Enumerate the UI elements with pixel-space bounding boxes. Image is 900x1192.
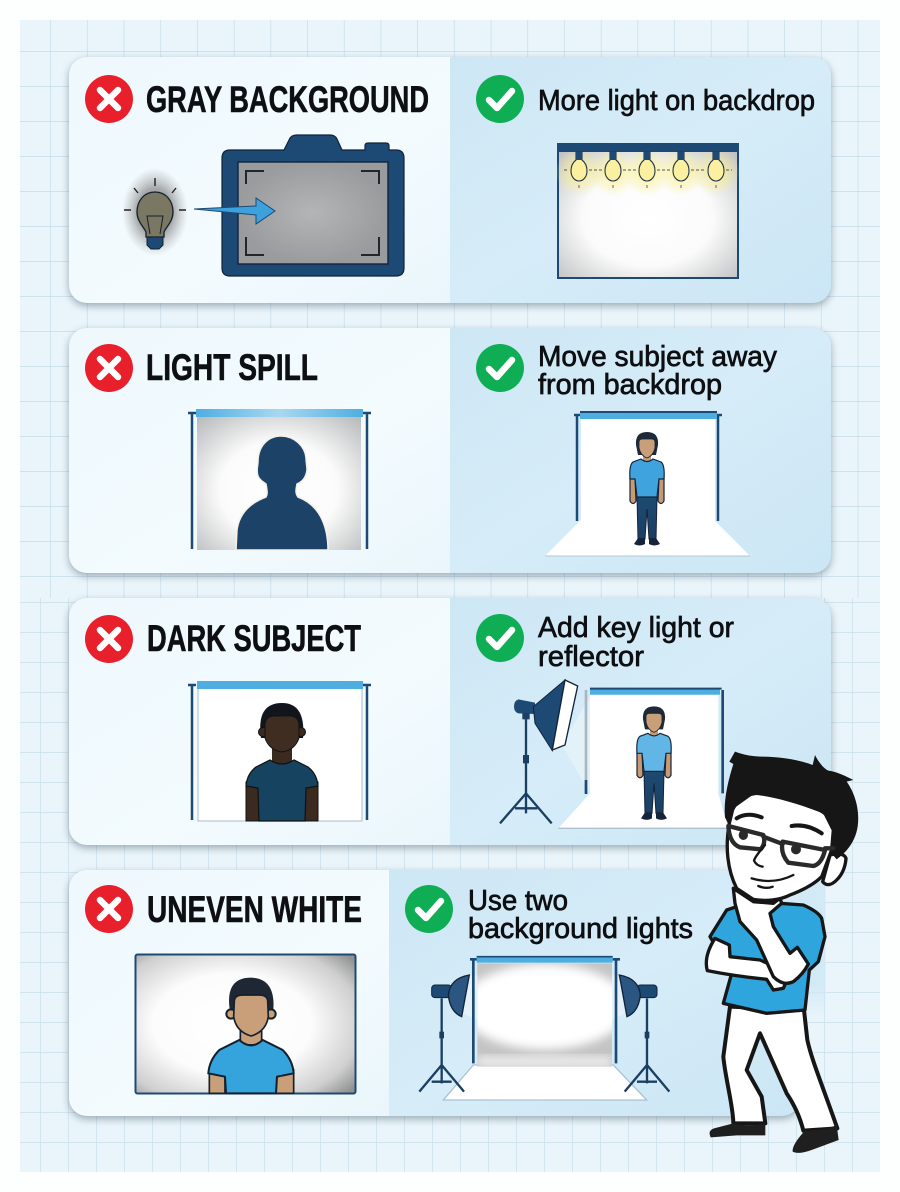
heading: dark subject: DARK SUBJECT xyxy=(147,618,361,659)
glasses xyxy=(728,826,833,866)
illustration: framed subject with uneven background xyxy=(136,954,356,1094)
text: reflector: reflector xyxy=(538,641,644,673)
icon: green check xyxy=(476,344,524,392)
illustration: backdrop with dark subject xyxy=(188,681,371,821)
arrow: light toward camera xyxy=(194,198,275,224)
icon: dim light bulb xyxy=(122,168,188,256)
arm folded xyxy=(706,938,790,990)
heading: gray background: GRAY BACKGROUND xyxy=(146,79,429,120)
arm to chin xyxy=(733,888,808,983)
icon: red cross xyxy=(85,615,133,663)
illustration: backdrop with silhouette and spill xyxy=(188,409,371,550)
pupils xyxy=(739,830,748,840)
text: use two: Use two xyxy=(468,885,568,917)
icon: red cross xyxy=(85,885,133,933)
text: more light on backdrop: More light on backdrop xyxy=(538,85,815,117)
illustration: key light softbox and subject xyxy=(500,680,728,828)
illustration: two background lights xyxy=(419,956,669,1100)
text: move subject away: Move subject away xyxy=(538,341,777,373)
icon: green check xyxy=(476,614,524,662)
character: thinking man with glasses xyxy=(706,752,858,1153)
panel: gray background xyxy=(69,57,831,303)
text: add key light or: Add key light or xyxy=(538,612,734,644)
illustration: bright backdrop with bulbs xyxy=(555,144,740,278)
icon: red cross xyxy=(85,75,133,123)
icon: camera with gray screen xyxy=(222,135,404,276)
heading: uneven white: UNEVEN WHITE xyxy=(147,889,362,930)
text: background lights: background lights xyxy=(468,913,693,945)
shoe right xyxy=(793,1125,839,1153)
panel: light spill xyxy=(69,328,831,573)
text: from backdrop: from backdrop xyxy=(538,369,722,401)
brows and eyes xyxy=(737,815,822,833)
nose and mouth xyxy=(752,845,793,888)
hair xyxy=(725,752,858,859)
panel: dark subject xyxy=(69,598,831,845)
panel: uneven white xyxy=(69,870,800,1116)
shoe left xyxy=(710,1123,765,1137)
icon: green check xyxy=(476,75,524,123)
illustration: subject away from backdrop xyxy=(545,412,750,556)
shirt xyxy=(710,903,825,1013)
face xyxy=(727,790,833,900)
ear xyxy=(823,854,846,885)
trousers xyxy=(723,1007,837,1131)
icon: green check xyxy=(405,885,453,933)
heading: light spill: LIGHT SPILL xyxy=(146,347,318,388)
icon: red cross xyxy=(85,344,133,392)
